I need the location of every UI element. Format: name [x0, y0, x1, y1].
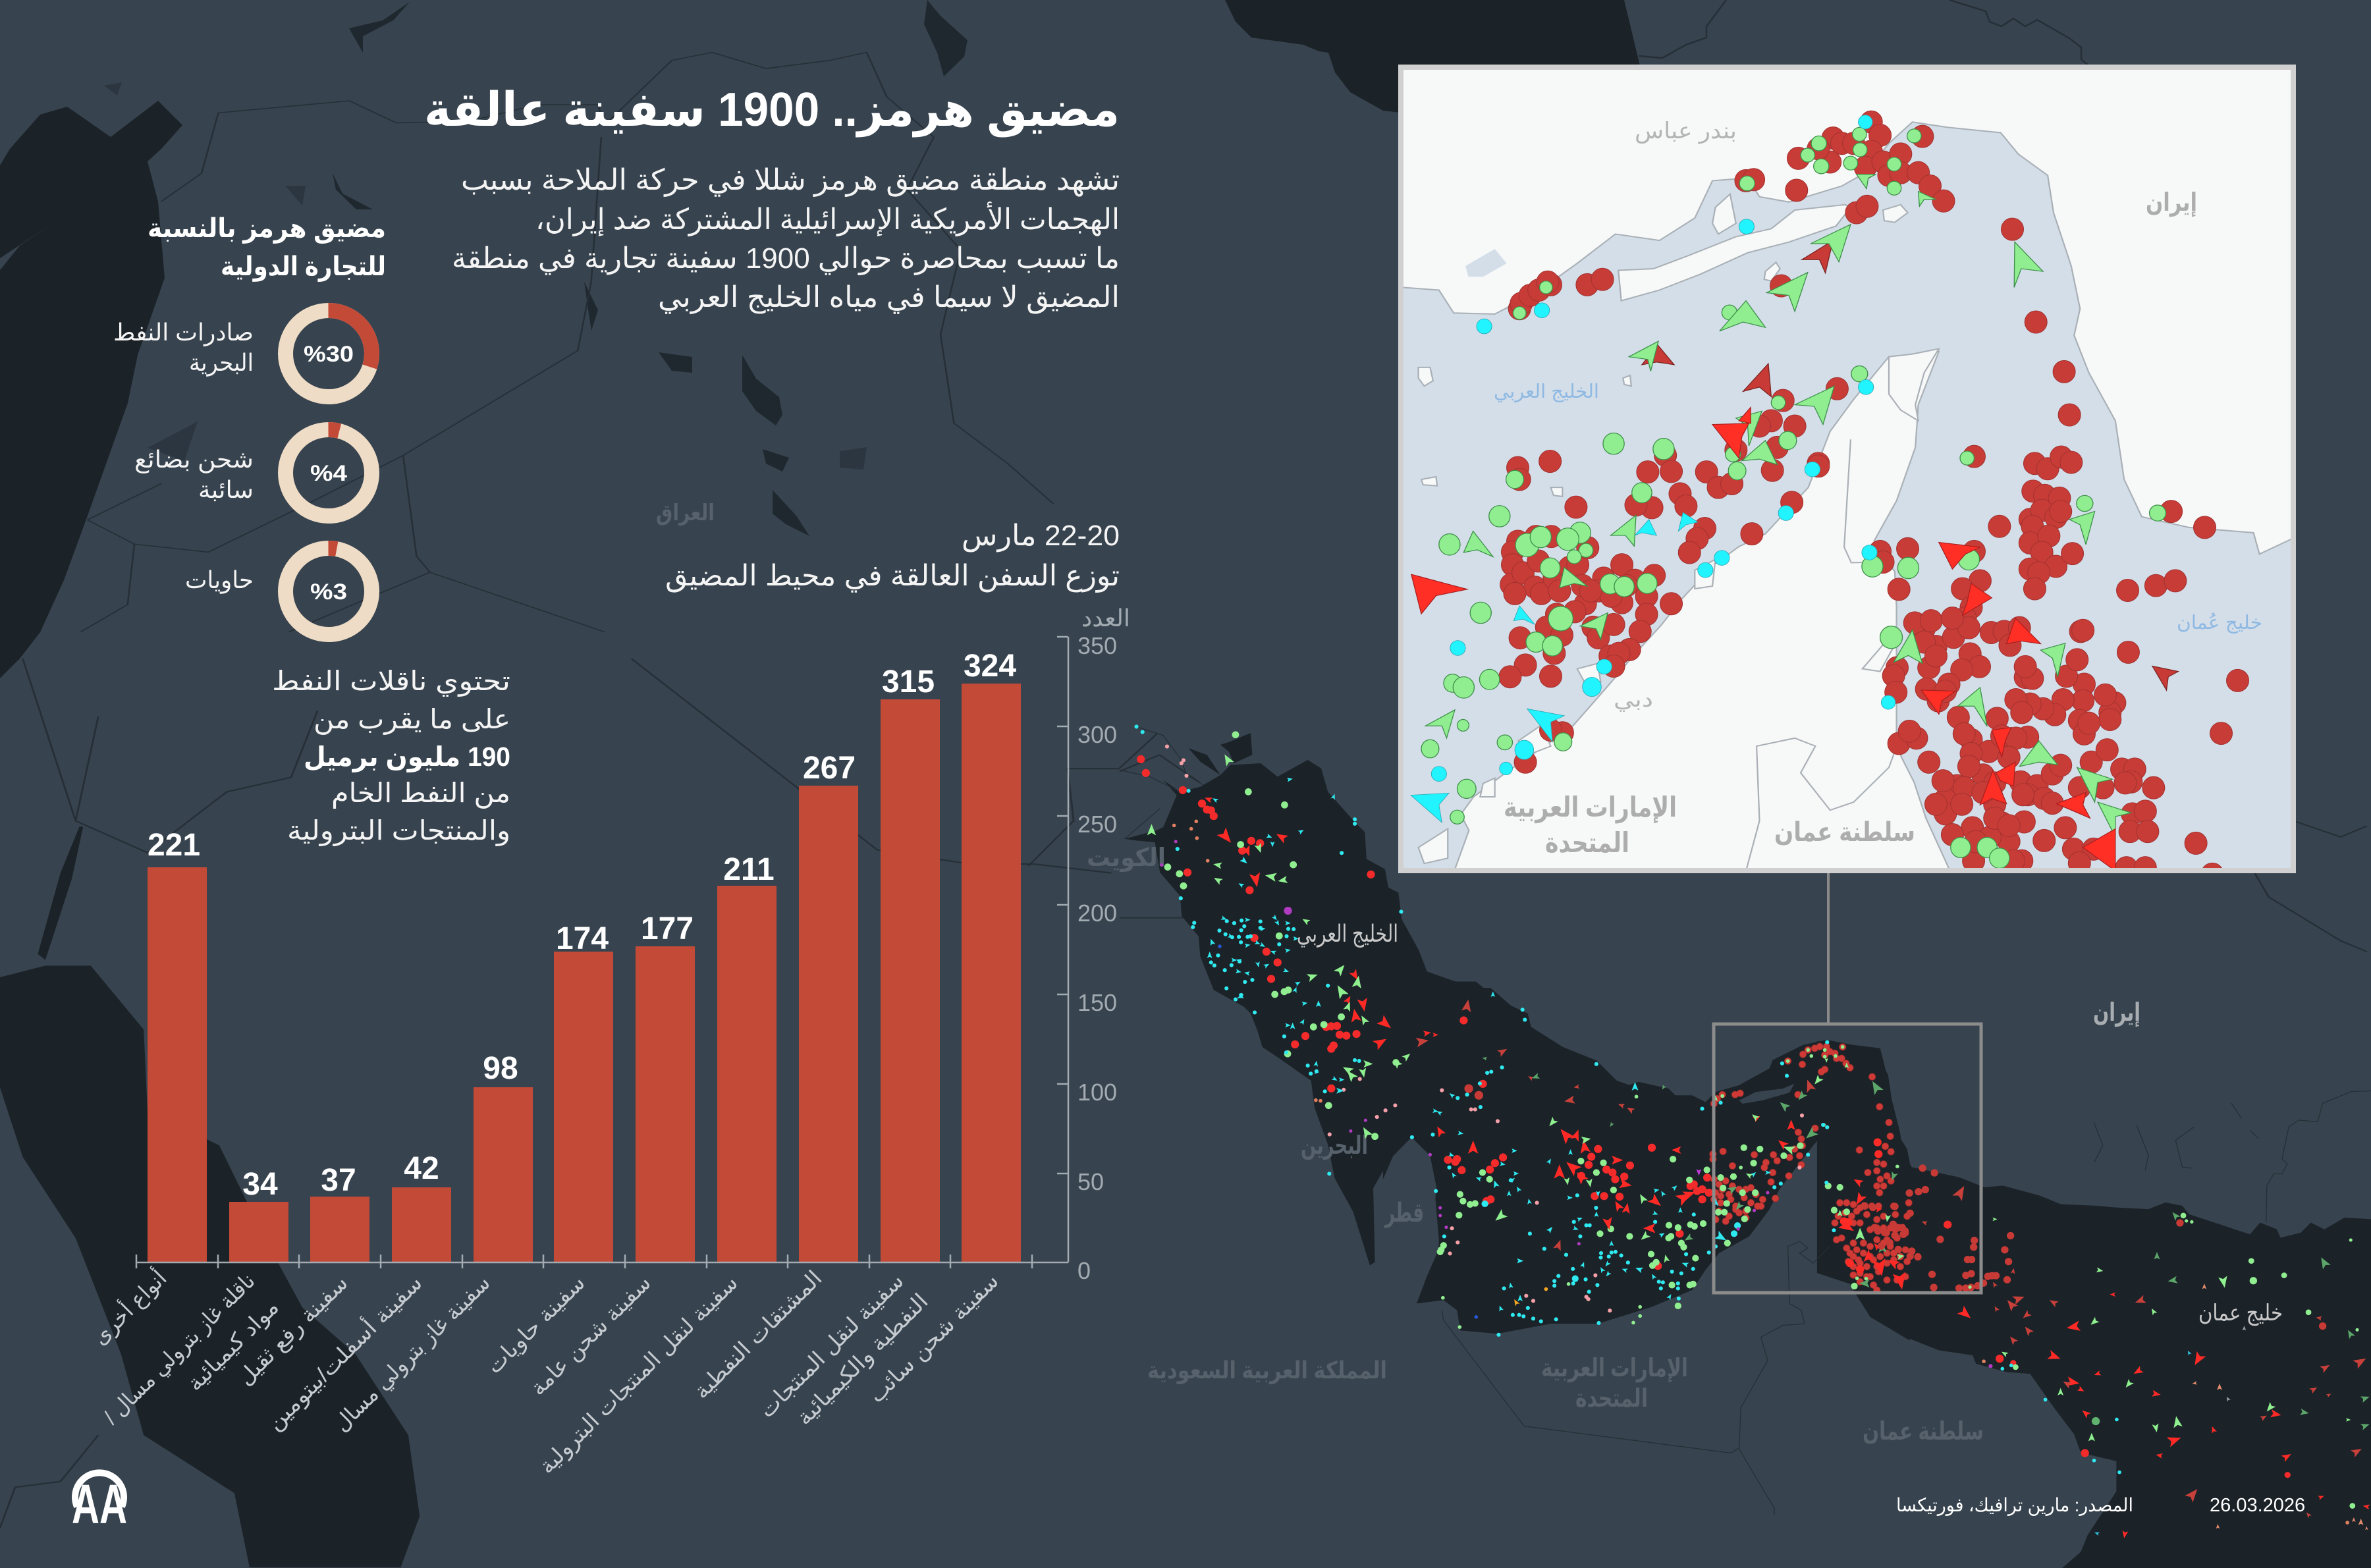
inset: place labels: إيران [2146, 189, 2197, 217]
ships: central Gulf and Hormuz [1376, 991, 1909, 1335]
tanker note: والمنتجات البترولية [287, 815, 510, 846]
map: Persian Gulf water [1125, 733, 1647, 1266]
inset: islands and land details [1419, 194, 1939, 863]
map: inland lakes [104, 0, 967, 935]
chart category labels: سفينة شحن عامة [526, 1270, 656, 1401]
chart value labels: 98 [483, 1051, 518, 1086]
map: Cyprus [0, 226, 49, 270]
icon: Anadolu Agency logo: AA [72, 1473, 127, 1535]
intro paragraph: الهجمات الأمريكية الإسرائيلية المشتركة ضد إيران، [535, 201, 1120, 236]
chart category labels: سفينة لنقل المنتجات [754, 1268, 908, 1422]
donut: containers 3%: %3 [310, 580, 347, 605]
ships: Gulf of Oman [1865, 1168, 2370, 1539]
inset: bright red ship arrows [1411, 408, 2115, 871]
donut: containers 3% [185, 548, 371, 635]
side heading [148, 214, 386, 282]
inset: place labels: سلطنة عمان [1774, 818, 1915, 847]
intro paragraph: المضيق لا سيما في مياه الخليج العربي [658, 281, 1120, 314]
inset: dark red ship arrows [1642, 240, 2178, 690]
chart category labels: سفينة حاويات [481, 1270, 590, 1379]
map: land labels: الإمارات العربية [1541, 1355, 1688, 1382]
date: 26.03.2026 [2210, 1495, 2305, 1516]
tanker note: 190 مليون برميل [304, 742, 510, 772]
chart category labels: سفينة غاز بترولي مسال [329, 1270, 495, 1436]
source credit: المصدر: مارين ترافيك، فورتيكسا [1896, 1495, 2133, 1516]
inset: green ship arrows [1425, 175, 2131, 837]
map: land labels [656, 500, 2140, 1446]
tanker note: على ما يقرب من [313, 704, 510, 735]
ships: northern Gulf [1137, 726, 1401, 1174]
chart y-axis labels: 250 [1077, 811, 1117, 838]
tanker note [272, 666, 510, 846]
donut: oil exports 30%: %30 [304, 342, 354, 367]
donut: bulk cargo 4% [134, 429, 371, 516]
inset: place labels: دبي [1614, 688, 1653, 712]
donut: bulk cargo 4%: سائبة [198, 476, 254, 503]
chart category labels [86, 1264, 1004, 1479]
chart value labels: 221 [148, 828, 200, 863]
map: land labels: المتحدة [1575, 1385, 1648, 1413]
chart y-axis labels: 0 [1077, 1257, 1091, 1284]
chart heading [665, 520, 1120, 593]
donut: bulk cargo 4%: شحن بضائع [134, 446, 254, 473]
side heading: للتجارة الدولية [221, 252, 386, 282]
chart category labels: ناقلة غاز بترولي مسال / [99, 1268, 260, 1429]
map: Qeshm island [1739, 1083, 1795, 1104]
map labels: seas: الخليج العربي [1297, 920, 1398, 948]
tanker note: من النفط الخام [331, 778, 510, 809]
chart heading: 22-20 مارس [962, 520, 1120, 553]
chart axes [136, 637, 1068, 1268]
bar chart [86, 605, 1130, 1479]
chart value labels: 174 [556, 921, 609, 956]
chart y-axis labels: 150 [1077, 989, 1117, 1016]
map: seas west and north [0, 0, 1640, 1567]
locator box on the strait [1714, 1024, 1981, 1293]
chart y-axis labels: 50 [1077, 1168, 1104, 1195]
title: مضيق هرمز.. 1900 سفينة عالقة [424, 84, 1120, 138]
chart category labels: سفينة أسفلت/بيتومين [261, 1269, 427, 1436]
map labels: seas: خليج عمان [2198, 1301, 2283, 1326]
chart value labels: 315 [882, 664, 935, 699]
inset: place labels: المتحدة [1545, 827, 1629, 858]
chart y-axis labels: 100 [1077, 1079, 1117, 1106]
map: land labels: سلطنة عمان [1863, 1418, 1984, 1446]
inset: Oman border [1746, 439, 1895, 871]
donut: oil exports 30%: صادرات النفط [113, 319, 254, 346]
chart category labels: سفينة شحن سائب [864, 1268, 1004, 1408]
side heading: مضيق هرمز بالنسبة [148, 214, 386, 244]
chart y-axis labels: 200 [1077, 900, 1117, 927]
chart value labels [148, 649, 1016, 1202]
inset: red ship circles [1499, 111, 2248, 885]
chart y-axis labels: 350 [1077, 632, 1117, 659]
donut: oil exports 30% [113, 311, 371, 396]
donut: oil exports 30%: البحرية [189, 349, 254, 377]
donut: containers 3%: حاويات [185, 566, 254, 594]
intro paragraph: تشهد منطقة مضيق هرمز شللا في حركة الملاحة بسبب [461, 164, 1120, 197]
chart category labels: سفينة رفع ثقيل [232, 1270, 353, 1390]
intro paragraph [452, 164, 1120, 314]
chart value labels: 211 [723, 852, 775, 887]
chart value labels: 177 [641, 911, 694, 946]
inset: place labels: الخليج العربي [1494, 381, 1599, 403]
map: Gulf central and Hormuz water [1383, 988, 1910, 1341]
inset: cyan ship circles [1431, 115, 1895, 781]
chart value labels: 324 [964, 649, 1016, 684]
map: land labels: العراق [656, 500, 715, 526]
inset: place labels: الإمارات العربية [1504, 792, 1677, 824]
map: land labels: المملكة العربية السعودية [1147, 1357, 1387, 1384]
icon: Anadolu Agency logo [72, 1473, 127, 1535]
chart y-axis labels [1077, 605, 1130, 1284]
map: land labels: قطر [1384, 1199, 1424, 1228]
chart bars [148, 684, 1021, 1262]
chart category labels: النفطية والكيميائية [792, 1289, 933, 1430]
map: Gulf of Oman water [1817, 1041, 2371, 1568]
inset: lake [1465, 249, 1507, 277]
chart category labels: مواد كيميائية [182, 1295, 284, 1396]
chart y-axis labels: 300 [1077, 721, 1117, 748]
chart heading: توزع السفن العالقة في محيط المضيق [665, 560, 1120, 593]
chart value labels: 37 [321, 1163, 356, 1198]
chart category labels: أنواع أخرى [86, 1264, 172, 1350]
inset: cyan ship arrows [1411, 512, 1698, 823]
tanker note: تحتوي ناقلات النفط [272, 666, 510, 697]
map: land labels: إيران [2093, 999, 2140, 1027]
donut: bulk cargo 4%: %4 [310, 461, 347, 486]
inset: place labels: بندر عباس [1635, 119, 1737, 144]
map labels: seas [1297, 920, 2283, 1326]
intro paragraph: ما تسبب بمحاصرة حوالي 1900 سفينة تجارية في منطقة [452, 242, 1120, 275]
chart category labels: سفينة لنقل المنتجات البترولية [534, 1270, 743, 1479]
chart value labels: 267 [803, 751, 856, 786]
inset: place labels: خليج عُمان [2177, 612, 2262, 634]
connector line from locator box to inset [1827, 871, 1830, 1024]
map: land labels: الكويت [1087, 844, 1166, 872]
chart y-axis labels: العدد [1081, 605, 1130, 632]
inset: place labels [1494, 119, 2262, 858]
inset: sea [1401, 122, 2293, 871]
inset map panel [1401, 67, 2293, 885]
chart value labels: 34 [242, 1167, 278, 1202]
map: land labels: البحرين [1301, 1132, 1368, 1160]
chart value labels: 42 [404, 1151, 439, 1186]
chart category labels: المشتقات النفطية [689, 1266, 827, 1403]
inset: green ship circles [1421, 127, 2166, 868]
